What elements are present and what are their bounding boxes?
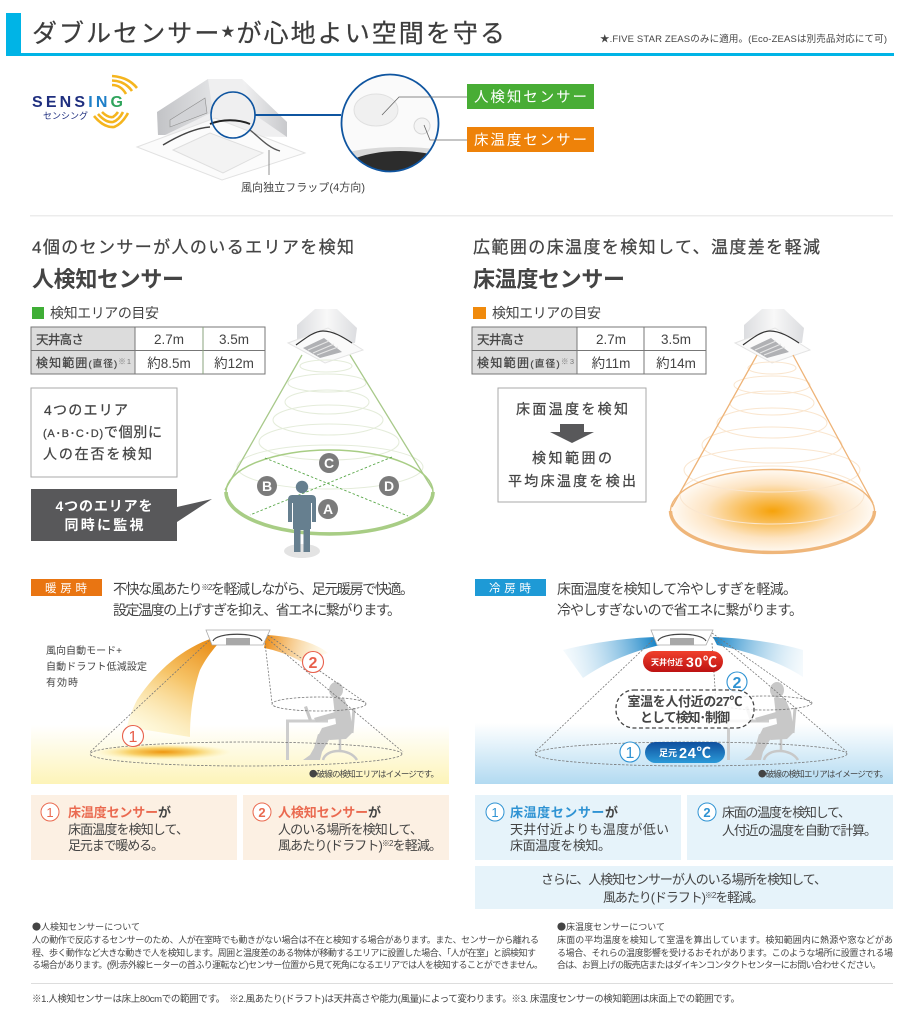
title: ダブルセンサー — [32, 20, 219, 48]
description — [113, 581, 414, 618]
zone markers: B — [262, 478, 272, 494]
magnifier connector — [255, 114, 341, 116]
text box with arrow: 床面温度を検知 — [516, 401, 628, 417]
box 2: 人のいる場所を検知して、 — [278, 822, 423, 837]
illustration: cassette air conditioner — [136, 74, 467, 180]
marker 1 — [620, 742, 640, 762]
dashed note — [616, 690, 754, 728]
panel: floor sensor — [472, 238, 875, 553]
pill: floor temperature — [645, 742, 725, 763]
person — [284, 481, 320, 558]
box 2: を軽減。 — [393, 838, 442, 853]
leader: floor sensor — [424, 125, 468, 140]
scene — [31, 630, 449, 784]
table: 天井高さ — [477, 332, 525, 347]
label: 人検知センサー — [467, 84, 594, 109]
callout — [31, 489, 212, 541]
legend: 検知エリアの目安 — [50, 305, 159, 321]
note: human sensor — [32, 920, 543, 970]
heading: 広範囲の床温度を検知して、温度差を軽減 — [473, 238, 820, 257]
note: human sensor: 人の動作で反応するセンサーのため、人が在室時でも動きがない場合は不在と検知する場合があります。また、センサーから離れる — [32, 934, 539, 945]
pill: floor temperature: 24℃ — [679, 746, 712, 762]
marker 2 — [302, 652, 324, 672]
title: が心地よい空間を守る — [236, 20, 505, 48]
marker 1 — [122, 726, 144, 746]
text box: (A･B･C･D)で個別に — [43, 424, 162, 440]
note: floor sensor — [557, 920, 893, 970]
note: floor sensor: ●床温度センサーについて — [557, 920, 665, 933]
box 3: ※2 — [705, 891, 717, 900]
text box — [31, 388, 177, 477]
description: ※2 — [201, 583, 213, 592]
text box: 人の在否を検知 — [43, 446, 152, 462]
box 2: 2 — [258, 805, 266, 820]
callout: 4つのエリアを — [56, 498, 152, 514]
text box with arrow — [498, 388, 646, 502]
box 3: さらに、人検知センサーが人のいる場所を検知して、 — [541, 872, 827, 887]
dashed note: 室温を人付近の27℃ — [628, 694, 742, 709]
zone markers — [257, 453, 399, 519]
mode note: 有効時 — [46, 676, 78, 689]
panel: human sensor — [31, 238, 433, 558]
text box with arrow: 平均床温度を検出 — [508, 473, 636, 489]
magnifier small ring — [211, 92, 255, 138]
scene — [475, 630, 893, 784]
marker 2: 2 — [733, 675, 742, 692]
box 1: 1 — [46, 805, 54, 820]
label: 人検知センサー: 人検知センサー — [474, 89, 587, 106]
table: ※1 — [118, 357, 131, 366]
badge — [475, 579, 546, 596]
description: を軽減しながら、足元暖房で快適。 — [211, 581, 414, 597]
note: human sensor: ●人検知センサーについて — [32, 920, 140, 933]
mode note — [46, 644, 147, 689]
leader: flap — [268, 150, 270, 175]
ceiling unit — [651, 630, 713, 645]
sensor name: 床温度センサー — [473, 267, 625, 292]
badge: 冷房時 — [489, 582, 532, 595]
icon: sensing logo: SENSING — [32, 94, 123, 111]
description: 冷やしすぎないので省エネに繋がります。 — [557, 602, 803, 618]
description — [557, 581, 803, 618]
box 2: 2 — [703, 805, 711, 820]
mode note: 風向自動モード+ — [46, 644, 122, 657]
table: 2.7m — [154, 332, 184, 347]
magnifier lens — [340, 74, 440, 172]
box 1 — [475, 795, 681, 860]
cone diagram — [225, 309, 433, 558]
description: 不快な風あたり — [113, 581, 203, 597]
table: 約11m — [592, 356, 630, 371]
marker 1: 1 — [129, 729, 138, 746]
header bar — [6, 13, 894, 56]
image note: ●破線の検知エリアはイメージです。 — [758, 768, 888, 780]
description: 床面温度を検知して冷やしすぎを軽減。 — [557, 581, 797, 597]
box 1: 1 — [491, 805, 499, 820]
box 1 — [31, 795, 237, 860]
image note: ●破線の検知エリアはイメージです。 — [309, 768, 439, 780]
zone markers: C — [324, 455, 334, 471]
box 2 — [243, 795, 449, 860]
box 2 — [687, 795, 893, 860]
table: 3.5m — [219, 332, 249, 347]
table — [472, 327, 706, 374]
label: 床温度センサー — [467, 127, 594, 152]
table: 検知範囲(直径) — [36, 356, 117, 370]
title: ★ — [221, 24, 234, 39]
box 3: を軽減。 — [715, 890, 764, 905]
note: floor sensor: 床面の平均温度を検知して室温を算出しています。検知範囲内に熱源や窓などがあ — [557, 934, 893, 945]
heading: 4個のセンサーが人のいるエリアを検知 — [32, 238, 354, 257]
pill: ceiling temperature — [643, 651, 723, 672]
text box: 4つのエリア — [44, 402, 128, 418]
box 2: 風あたり(ドラフト) — [278, 838, 383, 853]
zone markers: D — [384, 478, 394, 494]
box 3: 風あたり(ドラフト) — [603, 890, 706, 905]
table — [31, 327, 265, 374]
table: 天井高さ — [36, 332, 84, 347]
sensor name: 人検知センサー — [32, 267, 184, 292]
box 3 — [475, 866, 893, 909]
box 1: 床温度センサーが — [510, 805, 618, 820]
leader: human sensor — [382, 97, 468, 115]
cone diagram — [670, 309, 875, 553]
note: floor sensor: 合は、お買上げの販売店またはダイキンコンタクトセンターにお問い合わせください。 — [557, 959, 881, 970]
box 2: 床面の温度を検知して、 — [722, 805, 851, 820]
star note: ★.FIVE STAR ZEASのみに適用。(Eco-ZEASは別売品対応にて可) — [600, 33, 887, 45]
panel: cooling — [475, 579, 893, 909]
panel: heating — [31, 579, 449, 860]
label: 床温度センサー: 床温度センサー — [474, 132, 587, 149]
dashed note: として検知･制御 — [640, 710, 730, 725]
box 2: ※2 — [382, 839, 394, 848]
pill: ceiling temperature: 30℃ — [686, 654, 717, 670]
callout: 同時に監視 — [64, 517, 144, 533]
note: human sensor: 程、歩く動作など大きな動きで人を検知します。周囲と温度差のある物体が移動するエリアに設置した場合、「人が在室」と誤検知す — [32, 947, 536, 958]
table: 約14m — [656, 356, 696, 371]
caption: flap: 風向独立フラップ(4方向) — [241, 180, 365, 194]
footnotes: ※1.人検知センサーは床上80cmでの範囲です。 ※2.風あたり(ドラフト)は天井高さや能力(風量)によって変わります。※3. 床温度センサーの検知範囲は床面上での範囲です。 — [32, 993, 740, 1005]
ceiling unit — [206, 630, 270, 645]
marker 2: 2 — [309, 655, 318, 672]
table: 検知範囲(直径) — [477, 356, 560, 370]
icon: sensing logo — [32, 76, 137, 127]
description: 設定温度の上げすぎを抑え、省エネに繋がります。 — [113, 602, 401, 618]
badge: 暖房時 — [45, 582, 88, 595]
marker 1: 1 — [626, 745, 635, 762]
box 1: 床面温度を検知して、 — [68, 822, 189, 837]
zone markers: A — [323, 501, 333, 517]
table: 約12m — [214, 356, 254, 371]
note: floor sensor: る場合、それらの温度影響を受けるおそれがあります。このような場所に設置される場 — [557, 947, 893, 958]
note: human sensor: る場合があります。(例:赤外線ヒーターの首ふり運転など)センサー位置から見て死角になるエリアでは人を検知することができません。 — [32, 959, 543, 970]
table: 2.7m — [596, 332, 626, 347]
icon: sensing logo: センシング — [43, 110, 88, 121]
box 2: 人検知センサーが — [278, 805, 381, 820]
table: 3.5m — [661, 332, 691, 347]
text box with arrow: 検知範囲の — [532, 450, 612, 466]
pill: floor temperature: 足元 — [659, 748, 677, 758]
box 1: 床温度センサーが — [68, 805, 171, 820]
box 2: 人付近の温度を自動で計算。 — [722, 823, 877, 838]
mode note: 自動ドラフト低減設定 — [46, 660, 147, 673]
table: 約8.5m — [147, 356, 191, 371]
badge — [31, 579, 102, 596]
legend: 検知エリアの目安 — [492, 305, 601, 321]
box 1: 足元まで暖める。 — [68, 838, 164, 853]
pill: ceiling temperature: 天井付近 — [651, 657, 683, 667]
table: ※3 — [561, 357, 574, 366]
marker 2 — [727, 672, 747, 692]
box 1: 床面温度を検知。 — [510, 838, 611, 853]
box 1: 天井付近よりも温度が低い — [510, 822, 669, 837]
